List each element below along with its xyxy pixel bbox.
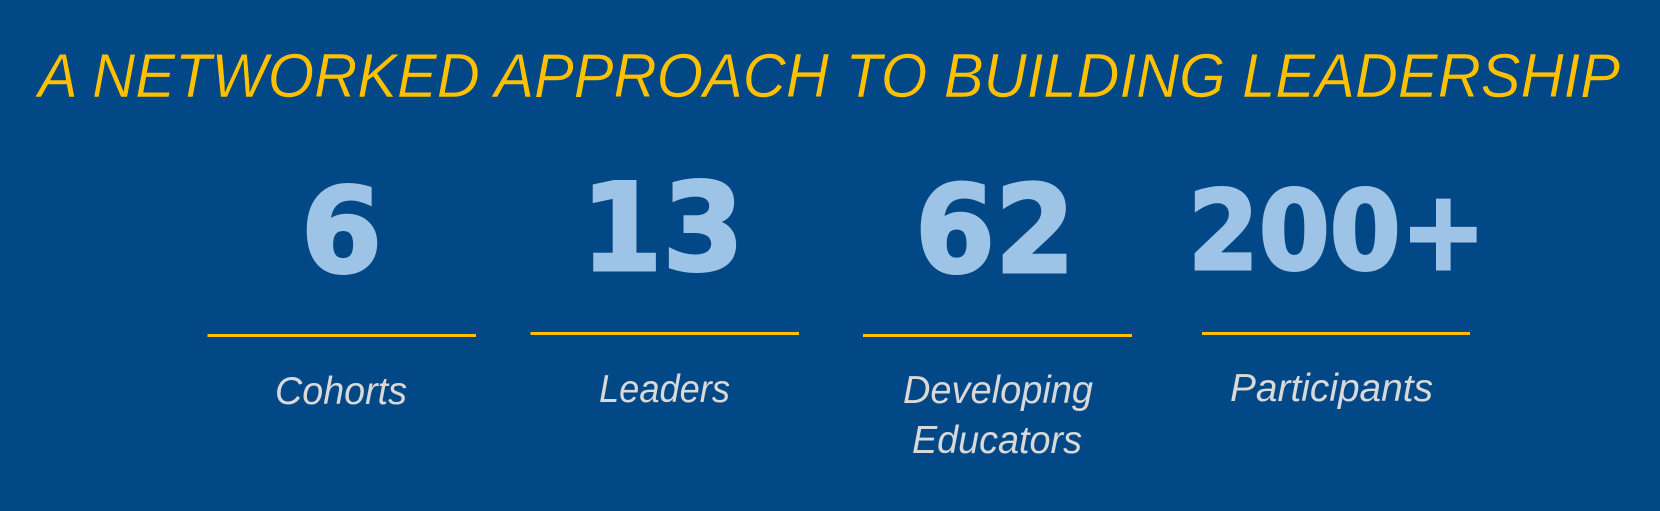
label: leaders: Leaders xyxy=(599,368,730,411)
number: 13: 13 xyxy=(581,158,744,299)
label: cohorts: Cohorts xyxy=(275,370,407,413)
stat: 62 developing educators xyxy=(863,160,1132,462)
title: A NETWORKED APPROACH TO BUILDING LEADERSHIP xyxy=(34,42,1620,111)
label: developing educators xyxy=(903,369,1093,462)
yellow rule: participants xyxy=(1202,332,1470,335)
yellow rule: cohorts xyxy=(208,334,476,337)
stat: 13 leaders xyxy=(530,158,799,411)
label: developing educators: Developing xyxy=(903,369,1093,412)
label: participants: Participants xyxy=(1230,367,1433,410)
stat: 200+ participants xyxy=(1188,167,1486,410)
stat: 6 cohorts xyxy=(208,162,476,413)
yellow rule: developing educators xyxy=(863,334,1132,337)
number: 200+: 200+ xyxy=(1188,167,1486,295)
yellow rule: leaders xyxy=(530,332,799,335)
label: developing educators: Educators xyxy=(912,419,1082,462)
number: 62: 62 xyxy=(915,160,1075,301)
number: 6: 6 xyxy=(301,162,382,300)
